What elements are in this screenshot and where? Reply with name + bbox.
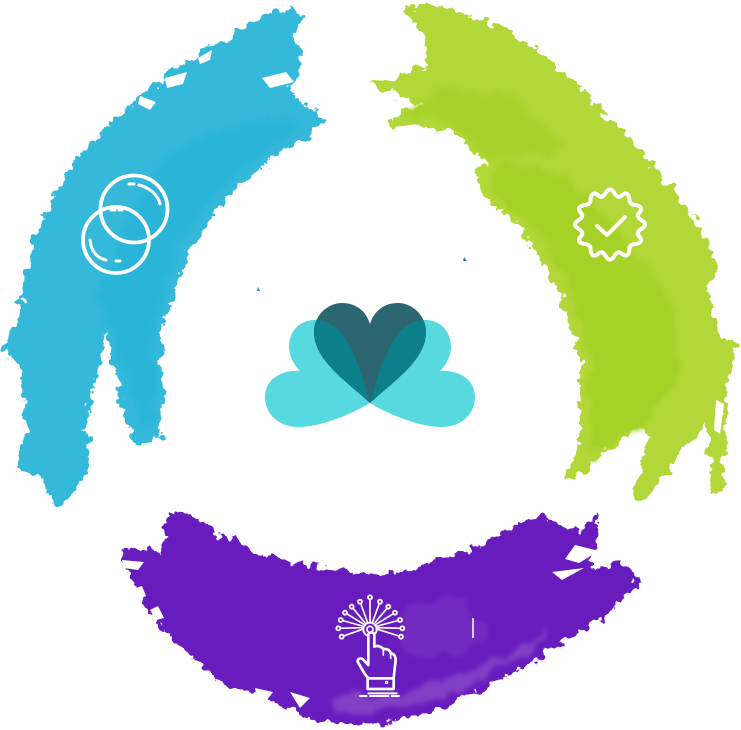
white flecks on green outer edge [660,170,724,490]
heart overlaps [314,320,426,403]
right light heart [370,320,475,427]
icon: verified badge [575,189,645,260]
icon: hand touching network [336,595,404,696]
panel: blue brush stroke [4,7,340,505]
white flecks on blue upper edge [138,50,340,110]
left light heart [265,320,370,427]
panel: green brush stroke [372,6,739,505]
centre dark heart [314,303,426,403]
panel: purple brush stroke [122,508,640,726]
logo: three hearts [265,303,475,427]
small stray marks [257,257,473,638]
white flecks on purple edges [122,545,599,708]
icon: overlapping circles [83,176,168,273]
